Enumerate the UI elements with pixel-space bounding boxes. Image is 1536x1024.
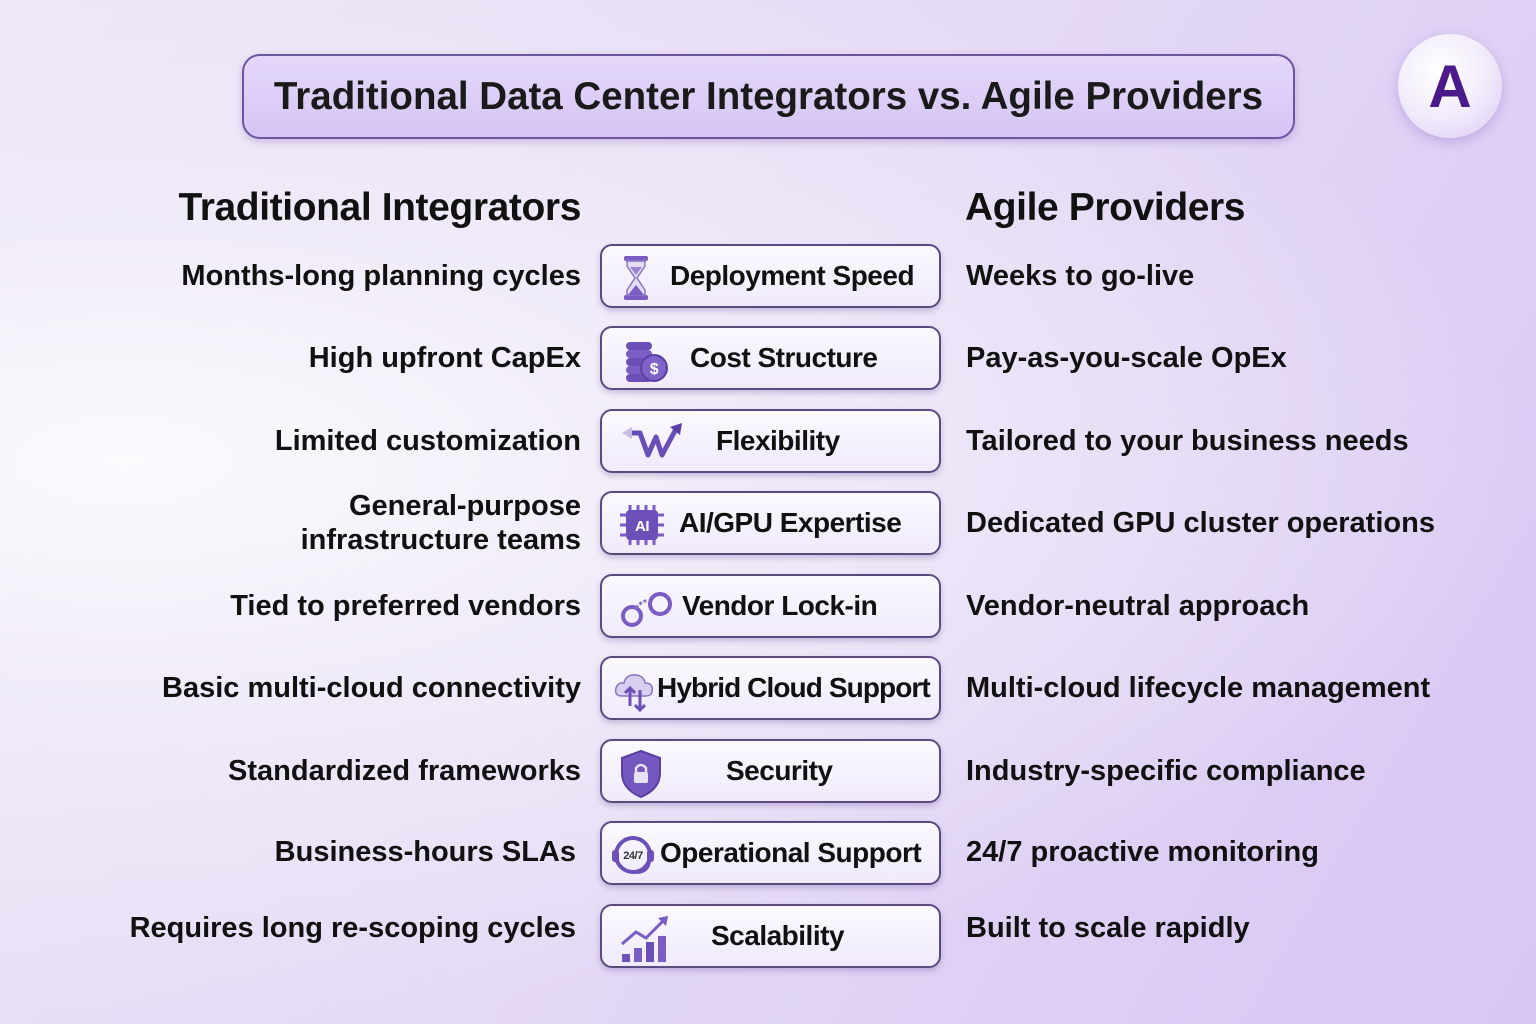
box: cost structure: Cost Structure: [690, 342, 877, 373]
title: Traditional Data Center Integrators vs. Agile Providers: [274, 74, 1263, 118]
left 3: Limited customization: [275, 425, 581, 457]
box: scalability: Scalability: [711, 920, 844, 951]
box: cost structure: [600, 326, 941, 390]
box: deployment speed: [600, 244, 941, 308]
box: operational support: [600, 821, 941, 885]
box: ai/gpu: AI/GPU Expertise: [679, 507, 901, 538]
left 4: [301, 490, 581, 556]
box: hybrid cloud: [600, 656, 941, 720]
heading: traditional: Traditional Integrators: [178, 186, 581, 229]
heading: agile: Agile Providers: [965, 186, 1245, 229]
right 9: Built to scale rapidly: [966, 912, 1250, 944]
icon: bar growth: [621, 916, 668, 962]
left 2: High upfront CapEx: [309, 342, 581, 374]
right 6: Multi-cloud lifecycle management: [966, 672, 1430, 704]
box: hybrid cloud: Hybrid Cloud Support: [657, 672, 930, 703]
left 8: Business-hours SLAs: [275, 836, 576, 868]
icon: shield: [621, 750, 661, 798]
icon: 24/7 headset: [612, 836, 654, 874]
left 6: Basic multi-cloud connectivity: [162, 672, 581, 704]
right 3: Tailored to your business needs: [966, 425, 1409, 457]
box: flexibility: Flexibility: [716, 425, 840, 456]
right 8: 24/7 proactive monitoring: [966, 836, 1319, 868]
title: [242, 54, 1295, 139]
left 4: infrastructure teams: [301, 524, 581, 556]
icon: handcuffs: [621, 592, 672, 627]
right 1: Weeks to go-live: [966, 260, 1194, 292]
icon: 24/7 headset: 24/7: [623, 850, 643, 862]
box: security: Security: [726, 755, 832, 786]
left 5: Tied to preferred vendors: [230, 590, 581, 622]
right 7: Industry-specific compliance: [966, 755, 1366, 787]
left 4: General-purpose: [349, 490, 581, 522]
icon: ai chip: [620, 505, 664, 545]
logo: [1398, 34, 1502, 138]
box: security: [600, 739, 941, 803]
icon: hourglass: [624, 256, 648, 300]
right 5: Vendor-neutral approach: [966, 590, 1309, 622]
left 7: Standardized frameworks: [228, 755, 581, 787]
icon: coins: $: [650, 361, 659, 378]
box: deployment speed: Deployment Speed: [670, 260, 914, 291]
box: flexibility: [600, 409, 941, 473]
left texts: Months-long planning cycles: [181, 260, 581, 292]
box: scalability: [600, 904, 941, 968]
box: operational support: Operational Support: [660, 837, 921, 868]
right 4: Dedicated GPU cluster operations: [966, 507, 1435, 539]
icon: cloud: [614, 674, 654, 712]
icon: coins: [626, 342, 668, 382]
box: vendor lock-in: [600, 574, 941, 638]
logo: A: [1428, 52, 1472, 120]
box: ai/gpu: [600, 491, 941, 555]
icon: ai chip: AI: [635, 518, 649, 535]
left 9: Requires long re-scoping cycles: [130, 912, 576, 944]
icon: flex arrow: [622, 423, 682, 458]
right 2: Pay-as-you-scale OpEx: [966, 342, 1287, 374]
box: vendor lock-in: Vendor Lock-in: [682, 590, 877, 621]
